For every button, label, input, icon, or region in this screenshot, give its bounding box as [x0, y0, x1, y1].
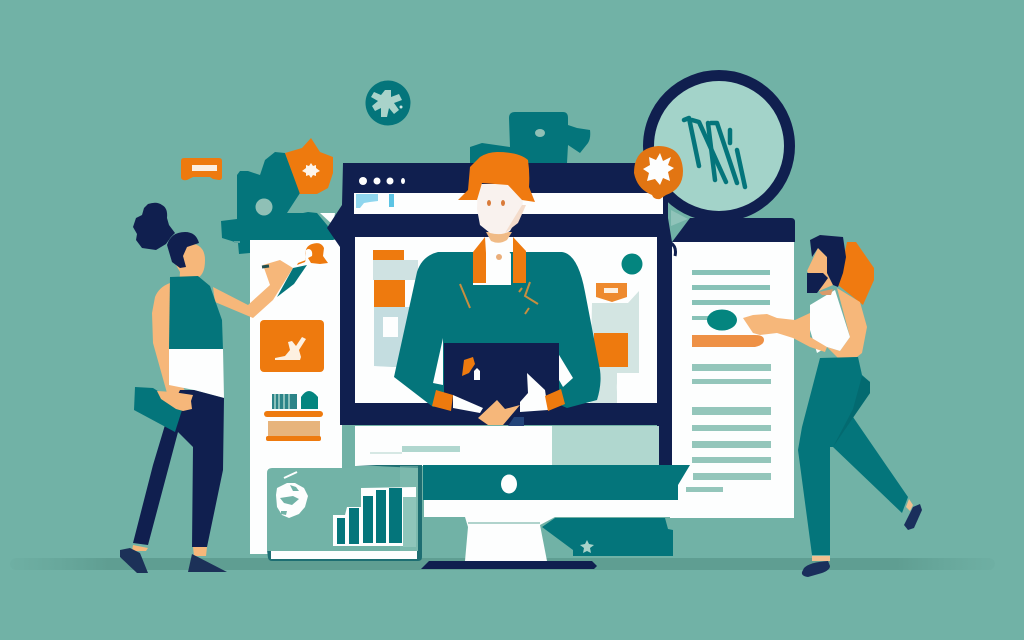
address bar — [354, 193, 663, 214]
icon: orange shield — [285, 138, 333, 194]
beard — [807, 273, 828, 293]
hair — [810, 235, 846, 287]
hair bun — [133, 203, 175, 250]
laptop logo — [462, 357, 475, 376]
left forearm — [453, 395, 483, 413]
icon: teal puzzle piece — [470, 112, 590, 163]
ankle back — [906, 499, 913, 511]
ankle front — [812, 556, 830, 561]
left shoe — [120, 548, 148, 573]
left arm — [152, 283, 189, 402]
collar — [473, 237, 511, 285]
hair — [167, 232, 199, 268]
triangle gap — [671, 210, 688, 226]
white neck — [465, 517, 555, 561]
list line — [692, 285, 770, 290]
neck — [486, 232, 512, 243]
pennant icon — [277, 265, 307, 297]
text lines — [686, 364, 771, 492]
card icon — [275, 337, 306, 360]
window dots — [359, 177, 405, 185]
eyes — [487, 200, 491, 206]
right forearm — [520, 373, 548, 412]
tank top — [169, 276, 223, 350]
right shoe — [188, 554, 227, 572]
back shoulder and torso skin — [827, 288, 867, 358]
ground shadow — [10, 558, 995, 570]
small mark — [284, 472, 297, 478]
pants front — [798, 357, 908, 555]
arm — [743, 313, 827, 352]
right arm — [213, 260, 293, 318]
stand right teal block — [542, 518, 673, 556]
mouth — [819, 289, 833, 295]
icon: orange chat bubble — [181, 158, 222, 180]
card base strip — [271, 551, 417, 559]
panel: central browser window — [327, 163, 688, 466]
torso — [394, 252, 601, 408]
lower screen — [355, 426, 552, 466]
panel: right white page — [670, 218, 795, 518]
base — [421, 561, 597, 569]
orange shelf — [264, 411, 323, 417]
hands — [478, 400, 520, 425]
left collage — [373, 250, 418, 367]
list line — [692, 316, 712, 320]
hair — [458, 152, 535, 202]
right collage — [590, 254, 657, 403]
camera dot — [501, 474, 517, 494]
sleeve white left — [433, 338, 443, 385]
icon: teal gear badge — [366, 80, 410, 126]
back shoe — [904, 504, 922, 530]
orange hair back — [838, 242, 874, 305]
white tank — [810, 290, 850, 353]
head — [477, 184, 523, 234]
neck and face — [172, 243, 205, 288]
person: central presenter — [394, 152, 601, 426]
icon: teal gear shape — [221, 152, 337, 254]
white shirt — [169, 349, 224, 398]
orange image card — [260, 320, 324, 372]
person: right man — [743, 235, 922, 577]
hand — [157, 391, 193, 411]
panel: left white page — [250, 213, 342, 554]
sleeve white right — [553, 345, 573, 387]
orange ribbon icon — [297, 243, 328, 265]
list line — [692, 300, 770, 305]
right cuff — [545, 389, 565, 411]
folder — [134, 387, 183, 432]
person: left woman — [120, 203, 293, 573]
main screen — [355, 237, 657, 403]
white chin band — [424, 500, 674, 517]
teal top band — [423, 465, 690, 500]
pants — [133, 390, 224, 547]
pants fold — [833, 376, 870, 447]
face — [807, 248, 833, 291]
orange base — [266, 436, 321, 441]
shelf books — [272, 394, 297, 409]
star icon — [580, 540, 594, 553]
bar chart — [333, 487, 416, 547]
pen — [262, 266, 269, 267]
ankles — [132, 545, 207, 556]
icon: orange asterisk badge — [634, 146, 683, 199]
magnifier scribble — [684, 118, 745, 187]
front shoe — [802, 561, 830, 577]
monitor — [421, 465, 690, 569]
chest marks — [460, 282, 538, 314]
tan box — [268, 421, 320, 437]
panel: laptop chart card — [267, 465, 422, 561]
list line — [692, 270, 770, 275]
left cuff — [432, 390, 453, 411]
magnifying glass — [648, 76, 790, 216]
orange pill — [692, 335, 764, 347]
curl — [671, 243, 676, 256]
teal oval — [707, 310, 737, 330]
laptop — [444, 343, 559, 405]
globe icon — [276, 483, 308, 518]
